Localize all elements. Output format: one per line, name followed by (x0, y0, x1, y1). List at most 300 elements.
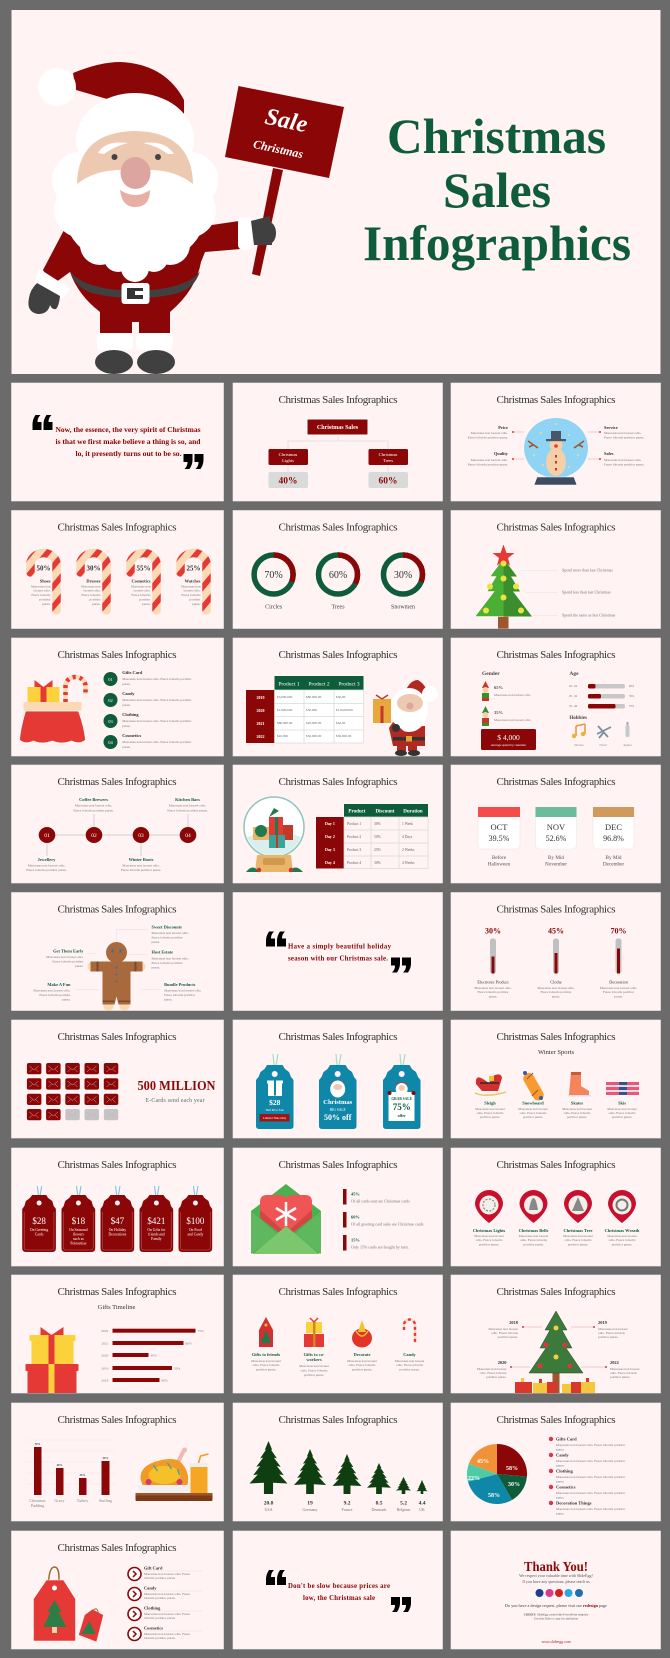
label: Kitchen Bars (167, 797, 208, 812)
thermometer: Decoration (600, 926, 637, 998)
table: products (246, 676, 364, 743)
icon: opening quote (266, 932, 286, 946)
quote text: lo, it presently turns out to be so. (76, 451, 182, 458)
item: Decorate: Decorate (354, 1352, 370, 1357)
tag: $100: and Candy (187, 1232, 203, 1236)
country labels: Denmark (372, 1507, 386, 1512)
pin: Christmas Wreath (605, 1190, 640, 1246)
donut: Trees 60% (318, 555, 358, 610)
item: Gifts to friends (251, 1317, 281, 1372)
list: Clothing (104, 712, 192, 728)
list: Cosmetics: purus. (122, 745, 131, 749)
tag: $47: $47 (111, 1216, 125, 1226)
item: Candy (395, 1320, 424, 1372)
legend: Maecenas non laoreet odio. Fusce lobortis porttitor (556, 1459, 626, 1463)
chart: vertical bars: 50% (103, 1456, 108, 1460)
table: discounts: 2 Weeks (402, 848, 415, 852)
message: If you have any questions, please reach us (522, 1579, 590, 1585)
candy cane: Watches: laoreet odio. (184, 588, 201, 592)
item: Cosmetics: Maecenas non laoreet odio. Fusce (144, 1632, 191, 1636)
label: 2020: porttitor purus. (486, 1375, 507, 1379)
chart: pie: 45% (477, 1459, 489, 1465)
heading: Christmas Sales Infographics (496, 1159, 616, 1171)
item: Gifts to co-workers: porttitor purus. (304, 1373, 324, 1377)
candy cane: Watches: porttitor (189, 598, 201, 602)
item: Decorate: odio. Fusce lobortis (349, 1363, 376, 1367)
table: discounts: Product 1 (347, 822, 361, 826)
box: Christmas Trees: Trees (383, 458, 393, 463)
heading: Christmas Sales Infographics (496, 1031, 616, 1043)
values: 4.4 (419, 1500, 426, 1506)
candy cane: Cosmetics: Fusce lobortis (131, 593, 151, 597)
table: products: $50,000.00 (306, 734, 322, 739)
item: Candy: Maecenas non laoreet odio. Fusce (144, 1592, 191, 1596)
legend: Maecenas non laoreet odio. Fusce lobortis porttitor (556, 1443, 626, 1447)
item: Candy: Candy (144, 1586, 157, 1590)
list: Candy: Candy (122, 691, 135, 696)
pin: Christmas Lights: Maecenas non laoreet (474, 1234, 504, 1238)
heading: Christmas Sales Infographics (278, 394, 398, 406)
label: 2020: odio. Fusce lobortis (480, 1371, 507, 1375)
label: Price: Fusce lobortis porttitor purus. (468, 436, 508, 440)
chart: vertical bars: Gravy (54, 1498, 64, 1503)
section: Hobbies: Hobbies (569, 716, 587, 721)
table: products: $80,000.00 (277, 721, 293, 726)
legend: Cosmetics (556, 1484, 576, 1490)
pin: Christmas Tree: porttitor purus. (568, 1242, 588, 1246)
pin: Christmas Wreath: Christmas Wreath (605, 1228, 640, 1233)
label: Jewellery: Maecenas non laoreet odio. (28, 864, 65, 868)
heading: Christmas Sales Infographics (58, 904, 176, 916)
candy cane: Watches: 25% (186, 564, 200, 572)
tag: $421 (140, 1186, 173, 1252)
tag: $28 (22, 1186, 56, 1252)
chart: horizontal bars: 40% (162, 1378, 168, 1382)
label: 2018: porttitor purus. (498, 1335, 518, 1339)
label: Snowboard (518, 1100, 548, 1119)
item: Decorate: Maecenas non laoreet (347, 1359, 377, 1363)
label: 2022: 2022 (610, 1360, 619, 1365)
table: discounts: Day 3 (325, 847, 335, 852)
label: Make A Fun: Fusce lobortis porttitor (39, 993, 71, 997)
chart: vertical bars: 70% (35, 1442, 40, 1446)
top box: Christmas Sales (317, 425, 359, 431)
label: 2022: Maecenas non laoreet (610, 1367, 640, 1371)
table: products: $50,000 (306, 708, 317, 713)
values (264, 1500, 426, 1506)
heading: Christmas Sales Infographics (496, 1286, 616, 1298)
section: Gender: Maecenas non laoreet odio (494, 718, 531, 722)
label: Coffee Brewers (73, 797, 114, 812)
heading: Christmas Sales Infographics (278, 649, 398, 661)
panel: food bar chart (12, 1403, 224, 1521)
table: products: 2019 (256, 695, 264, 700)
heading: Christmas Sales Infographics (58, 1031, 176, 1043)
box: Christmas Lights (268, 449, 308, 465)
label: Skis: Skis (618, 1100, 626, 1106)
label: 2022: odio. Fusce lobortis (610, 1371, 638, 1375)
tag: $18: such as (73, 1237, 84, 1241)
calendar: DEC: 96.8% (603, 834, 624, 843)
table: products: $62,00 (336, 721, 346, 726)
table: discounts: Day 4 (325, 860, 335, 865)
top box (307, 419, 368, 435)
label: Make A Fun: Maecenas non laoreet odio. (33, 988, 71, 992)
label: Sleigh: Sleigh (484, 1100, 496, 1106)
section: Age bars: Age (569, 671, 579, 677)
panel: quote spirit of Christmas (12, 383, 224, 501)
panel: gifts timeline (12, 1275, 224, 1393)
chart: horizontal bars: 75% (198, 1329, 204, 1333)
calendar: OCT: OCT (490, 822, 508, 832)
calendar: NOV: By Mid (548, 855, 564, 861)
thermometer: Electronic Product (474, 926, 512, 998)
legend (549, 1436, 626, 1516)
donut: Circles 70%: Circles (265, 604, 283, 610)
section: Gender: Maecenas non laoreet odio (494, 693, 531, 697)
callout: spend less: Spend less than last Christmas (562, 590, 611, 594)
chart: pie: 58% (488, 1493, 500, 1499)
label: Sleigh (475, 1100, 505, 1119)
legend: Maecenas non laoreet odio. Fusce lobortis porttitor (556, 1507, 626, 1511)
label: Quality: Fusce lobortis porttitor purus. (468, 462, 508, 466)
calendar: DEC (593, 807, 634, 868)
label: Bundle Products: Maecenas non laoreet odio. (164, 988, 202, 992)
candy cane: Watches: Fusce lobortis (181, 593, 201, 597)
tag: $28: Cards (35, 1232, 44, 1236)
table: discounts: Product (348, 810, 366, 814)
thermometer: Electronic Product: 30% (485, 926, 501, 936)
item: Candy: lobortis porttitor purus. (144, 1596, 176, 1600)
legend: Maecenas non laoreet odio. Fusce lobortis porttitor (556, 1475, 626, 1479)
section: Gender: Gender (482, 671, 500, 677)
list: Gifts Card: Maecenas non laoreet odio. Fusce lobortis porttitor (122, 677, 192, 681)
callout: average spend: Average spend by customer (491, 743, 527, 747)
label: Coffee Brewers: Coffee Brewers (79, 797, 108, 802)
tag: $421: friends and (148, 1232, 165, 1236)
credit: CREDIT: SlideEgg created this PowerPoint template (524, 1612, 589, 1616)
candy cane: Shoes: porttitor (39, 598, 51, 602)
heading: Christmas Sales Infographics (58, 1542, 176, 1554)
legend: Maecenas non laoreet odio. Fusce lobortis porttitor (556, 1491, 626, 1495)
section: Hobbies (569, 716, 633, 747)
thermometer: Decoration: purus. (614, 994, 623, 998)
tag: $100 (178, 1186, 212, 1252)
heading: Christmas Sales Infographics (496, 904, 616, 916)
label: Skis (607, 1100, 637, 1119)
label: Skis: Maecenas non laoreet (607, 1107, 637, 1111)
tag: $100: On Food (189, 1228, 202, 1232)
item: Gifts to co-workers: Gifts to co- (304, 1352, 325, 1357)
chart: vertical bars: Turkey (77, 1498, 88, 1503)
table: discounts: Product 2 (347, 835, 361, 839)
table: discounts: 30% (374, 822, 381, 826)
item: Cosmetics: lobortis porttitor purus. (144, 1636, 176, 1640)
candy cane: Cosmetics: Cosmetics (131, 578, 151, 584)
list: Clothing: Maecenas non laoreet odio. Fusce lobortis porttitor (122, 719, 192, 723)
box: Christmas Trees (368, 449, 408, 465)
label: Skates: porttitor purus. (567, 1115, 587, 1119)
panel: red price tags (12, 1148, 224, 1266)
label: Jewellery: Fusce lobortis porttitor purus. (26, 868, 67, 872)
heading: Christmas Sales Infographics (278, 522, 398, 534)
panel: 500 million e-cards (12, 1020, 224, 1138)
stat: 500 million (138, 1078, 216, 1104)
table: products: $80,000.00 (306, 695, 322, 700)
pin: Christmas Lights (473, 1190, 506, 1246)
table: discounts (316, 804, 428, 868)
value 40%: 40% (278, 476, 298, 486)
icon: gift tags with trees (34, 1567, 104, 1642)
callout: spend more: Spend more than last Christmas (562, 568, 613, 572)
design request line: Do you have a design request, please visit our redesign page (505, 1603, 607, 1609)
node 01 (39, 827, 55, 843)
subheading: Gifts Timeline (98, 1304, 135, 1311)
pin: Christmas Bells: porttitor purus. (523, 1242, 544, 1246)
item: Gifts to friends: Maecenas non laoreet (251, 1359, 281, 1363)
table: discounts: Discount (376, 810, 395, 814)
heading: Christmas Sales Infographics (278, 1159, 398, 1171)
country labels (264, 1507, 425, 1512)
pin: Christmas Lights: porttitor purus. (479, 1242, 499, 1246)
label: Sweet Discounts (152, 924, 189, 944)
label: 2018: odio. Fusce lobortis (491, 1331, 519, 1335)
country labels: USA (264, 1507, 273, 1512)
label: Host Estate: purus. (152, 966, 160, 970)
country labels: UK (419, 1507, 425, 1512)
label: Winter Boots: Maecenas non laoreet odio. (122, 864, 160, 868)
label: Snowboard: Snowboard (522, 1100, 544, 1106)
quote text: is that we first make believe a thing is so, and (56, 439, 201, 446)
tag: 75% off (383, 1054, 420, 1129)
illustration: Santa holding sale sign: Sale (263, 104, 310, 138)
panel: tree timeline (451, 1275, 660, 1393)
title: Christmas Sales Infographics: Christmas (387, 108, 606, 164)
panel: org chart (233, 383, 442, 501)
pin: Christmas Tree: odio. Fusce lobortis (565, 1238, 592, 1242)
label: Sweet Discounts: Sweet Discounts (152, 924, 182, 930)
quote text (288, 1583, 390, 1602)
item: Gift Card: Maecenas non laoreet odio. Fusce (144, 1572, 191, 1576)
node 02: 02 (91, 833, 97, 839)
values: 19 (307, 1500, 313, 1506)
chart: pie: 30% (508, 1482, 520, 1488)
panel: gift bag list (12, 638, 224, 756)
illustration: roast turkey and drink (136, 1448, 212, 1501)
donut: Trees 60%: Trees (331, 604, 345, 610)
tag: $18: On Seasonal (69, 1228, 88, 1232)
legend: Clothing (556, 1468, 574, 1474)
list: Candy: 02 (108, 698, 113, 703)
donut: Snowmen 30% (384, 555, 422, 610)
icon: tree with gifts (515, 1311, 595, 1393)
tag: Santa 50% off: Christmas (323, 1099, 353, 1106)
candy cane: Dresses (80, 553, 106, 610)
thermometer: Electronic Product: Electronic Product (477, 980, 509, 984)
table: products: Product 1 (278, 682, 300, 688)
icon: gingerbread man (88, 942, 146, 1010)
pin: Christmas Bells: Maecenas non laoreet (519, 1234, 548, 1238)
section: Gender (482, 671, 531, 726)
quote text: season with our Christmas sale. (288, 956, 388, 962)
chart: vertical bars: 40% (57, 1463, 62, 1467)
tag: $421: $421 (147, 1216, 165, 1226)
tag: $47: Decorations (108, 1232, 127, 1236)
stat: 60% (343, 1212, 424, 1228)
pin: Christmas Tree: Maecenas non laoreet (563, 1234, 593, 1238)
legend: purus. (556, 1448, 565, 1452)
list: Candy: Maecenas non laoreet odio. Fusce lobortis porttitor (122, 698, 192, 702)
donut: Snowmen 30%: 30% (394, 570, 412, 581)
label: Winter Boots: Winter Boots (129, 857, 154, 862)
list: Candy: purus. (122, 703, 131, 707)
table: discounts: 25% (374, 848, 381, 852)
table: products: $30,000.00 (336, 734, 352, 739)
item: Gifts to co-workers: odio. Fusce lobortis (301, 1368, 328, 1372)
label: Skates (562, 1100, 592, 1119)
label: Kitchen Bars: Kitchen Bars (175, 797, 200, 802)
thermometer: Clothe: 45% (548, 926, 564, 936)
tag: $47: On Holiday (109, 1228, 126, 1232)
chart: vertical bars: Pudding (31, 1503, 44, 1508)
label: Bundle Products: Bundle Products (164, 982, 196, 987)
chart: horizontal bars: 50% (174, 1366, 180, 1370)
callout: spend same (533, 612, 616, 618)
calendar: NOV: NOV (547, 822, 566, 832)
section: Hobbies: Apples (623, 743, 633, 747)
label: 2022: porttitor purus. (610, 1375, 630, 1379)
label: Price (468, 425, 524, 440)
tag: $18 (62, 1186, 95, 1252)
candy cane: Shoes: Shoes (40, 578, 51, 584)
chart: vertical bars: Stuffing (99, 1498, 112, 1503)
label: Sales: Sales (604, 451, 614, 456)
candy cane: Cosmetics: Maecenas non (131, 584, 151, 588)
list: Gifts Card (104, 670, 192, 686)
label: 2020: Maecenas non laoreet (477, 1367, 507, 1371)
heading: Christmas Sales Infographics (58, 776, 176, 788)
candy cane: Dresses: Dresses (86, 578, 101, 584)
tag: Santa 50% off (319, 1054, 356, 1129)
item: Cosmetics: Cosmetics (144, 1626, 163, 1630)
label: 2018: Maecenas non laoreet (488, 1327, 518, 1331)
heading: Christmas Sales Infographics (496, 394, 616, 406)
panel: candy canes (12, 510, 224, 628)
legend: Candy (556, 1452, 570, 1458)
table: products: $110,000.00 (336, 708, 353, 713)
candy cane: Watches (180, 553, 206, 610)
panel: timeline (12, 765, 224, 883)
label: Skis: odio. Fusce lobortis (609, 1111, 636, 1115)
tag: $28: On Greeting (30, 1228, 48, 1232)
item: Candy: Candy (403, 1352, 417, 1357)
heading: Christmas Sales Infographics (58, 1414, 176, 1426)
panel: pie chart (451, 1403, 660, 1521)
node 03 (133, 827, 149, 843)
values: 20.8 (264, 1500, 274, 1506)
label: 2020: 2020 (498, 1360, 507, 1365)
icon: opening quote (32, 415, 52, 430)
list: Gifts Card: 01 (108, 677, 113, 682)
quote text: Have a simply beautiful holiday (288, 944, 392, 950)
calendar: NOV: 52.6% (546, 834, 567, 843)
label: 2019: Maecenas non laoreet (598, 1327, 628, 1331)
chart: horizontal bars: 2021 (102, 1342, 109, 1346)
item: Clothing: Clothing (144, 1606, 161, 1610)
tag: gift: $28 (269, 1098, 281, 1107)
list: Clothing: purus. (122, 724, 131, 728)
chart: horizontal bars: 2022 (102, 1329, 109, 1333)
item: Candy: odio. Fusce lobortis (396, 1363, 424, 1367)
tag: gift: Half Price Sale (266, 1108, 284, 1112)
panel: globe with discount table (233, 765, 442, 883)
item: Cosmetics (128, 1626, 202, 1640)
icon: closing quote (184, 454, 204, 469)
calendar: NOV (536, 807, 576, 868)
tag: Santa 50% off: BIG SALE (330, 1108, 347, 1112)
label: Service: Fusce lobortis porttitor purus. (604, 436, 644, 440)
title: Christmas Sales Infographics: Infographics (363, 215, 631, 271)
chart: horizontal bars (102, 1329, 204, 1382)
quote text: low, the Christmas sale (303, 1595, 375, 1602)
chart: pictogram pine trees (250, 1441, 428, 1494)
stat: 45% (343, 1189, 410, 1204)
icon: skis (606, 1082, 639, 1095)
website: www.slideegg.com (541, 1640, 571, 1644)
candy cane: Dresses: 30% (86, 564, 100, 572)
subheading: Winter Sports (538, 1049, 574, 1056)
country labels: France (342, 1507, 353, 1512)
heading: Christmas Sales Infographics (58, 1159, 176, 1171)
credit (524, 1612, 589, 1620)
label: 2019: odio. Fusce lobortis (598, 1331, 626, 1335)
list: Candy (104, 691, 192, 707)
item: Candy: porttitor purus. (399, 1368, 420, 1372)
node 01: 01 (44, 833, 50, 839)
values: 8.5 (376, 1500, 383, 1506)
item: Gifts to friends: porttitor purus. (256, 1368, 276, 1372)
heading: Christmas Sales Infographics (278, 1286, 398, 1298)
thermometer: Decoration: Maecenas non laoreet odio. (600, 986, 637, 990)
callout: spend more (521, 568, 613, 572)
thermometer: Electronic Product: Fusce lobortis porttitor (477, 990, 509, 994)
candy cane: Shoes: purus. (42, 602, 51, 606)
thermometer: Clothe: Fusce lobortis porttitor (540, 990, 572, 994)
item: Candy: Maecenas non laoreet (395, 1359, 424, 1363)
label: Get Them Early (46, 948, 84, 968)
pin: Christmas Tree (563, 1190, 593, 1246)
heading: Christmas Sales Infographics (58, 522, 176, 534)
label: Coffee Brewers: Maecenas non laoreet odio. (75, 804, 112, 808)
value 60% (368, 472, 408, 488)
label: Kitchen Bars: Maecenas non laoreet odio. (169, 804, 206, 808)
section: Age bars: 75% (629, 705, 635, 708)
table: discounts: 30% (374, 861, 381, 865)
icon: stacked gifts (26, 1327, 78, 1393)
item: Candy (128, 1586, 202, 1600)
label: 2019 (571, 1320, 628, 1339)
panel: product table with Santa (233, 638, 442, 756)
title: Christmas Sales Infographics (363, 108, 631, 271)
box: Christmas Trees: Christmas (379, 452, 398, 457)
country labels: Belgium (397, 1507, 411, 1512)
calendar: DEC: December (603, 862, 624, 868)
label: Host Estate: Fusce lobortis porttitor (152, 961, 183, 965)
thermometer: Decoration: Decoration (609, 980, 629, 984)
panel: quote prices (233, 1531, 442, 1649)
item: Clothing (128, 1606, 202, 1620)
stat: 60%: Of all greeting card sales are Christmas cards (351, 1222, 424, 1226)
